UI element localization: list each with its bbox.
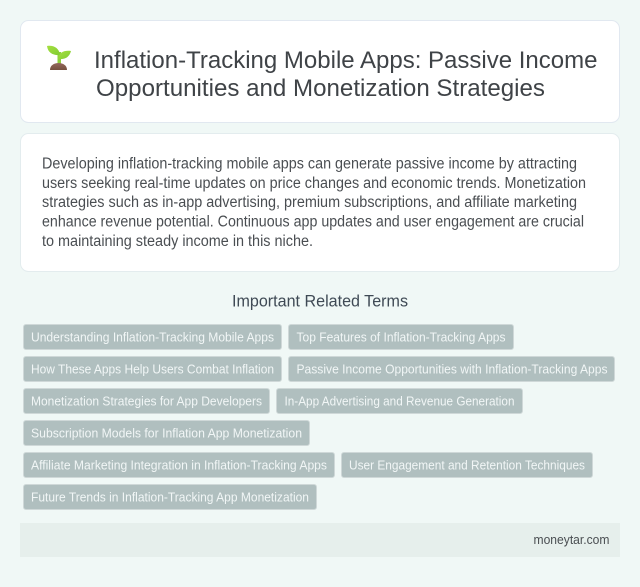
tag: Monetization Strategies for App Developers	[31, 394, 262, 408]
summary paragraph: strategies such as in-app advertising, premium subscriptions, and affiliate marketing	[42, 194, 577, 211]
tag: Passive Income Opportunities with Inflation-Tracking Apps	[296, 362, 608, 376]
tag	[342, 452, 592, 478]
icon: sprout	[47, 46, 71, 70]
tag: Understanding Inflation-Tracking Mobile Apps	[31, 330, 274, 344]
summary paragraph: to maintaining steady income in this niche.	[42, 233, 313, 250]
tag	[288, 324, 514, 350]
tag	[288, 356, 614, 382]
summary paragraph: users seeking real-time updates on price changes and economic trends. Monetization	[42, 175, 586, 192]
tag	[276, 388, 522, 414]
tag	[24, 420, 310, 446]
tag: User Engagement and Retention Techniques	[349, 458, 585, 472]
tag	[24, 356, 282, 382]
tag	[24, 484, 316, 510]
tag: Subscription Models for Inflation App Monetization	[31, 426, 302, 440]
summary paragraph	[42, 155, 586, 250]
tag list	[24, 324, 614, 510]
tag: Affiliate Marketing Integration in Inflation-Tracking Apps	[31, 458, 327, 472]
tag	[24, 388, 270, 414]
summary paragraph: enhance revenue potential. Continuous app updates and user engagement are crucial	[42, 214, 584, 231]
panel: header	[20, 20, 620, 122]
tag: Future Trends in Inflation-Tracking App Monetization	[31, 490, 309, 504]
summary paragraph: Developing inflation-tracking mobile apps can generate passive income by attracting	[42, 155, 577, 172]
title	[94, 47, 598, 102]
title: Opportunities and Monetization Strategies	[96, 75, 545, 102]
footer bar	[20, 523, 620, 557]
title: Inflation-Tracking Mobile Apps: Passive Income	[94, 47, 598, 74]
footer source text: moneytar.com	[534, 533, 610, 547]
tag: How These Apps Help Users Combat Inflation	[31, 362, 274, 376]
heading: important related terms: Important Related Terms	[232, 292, 408, 310]
tag: Top Features of Inflation-Tracking Apps	[296, 330, 506, 344]
panel: summary	[20, 134, 620, 272]
tag	[24, 452, 334, 478]
tag	[24, 324, 282, 350]
tag: In-App Advertising and Revenue Generation	[284, 394, 514, 408]
